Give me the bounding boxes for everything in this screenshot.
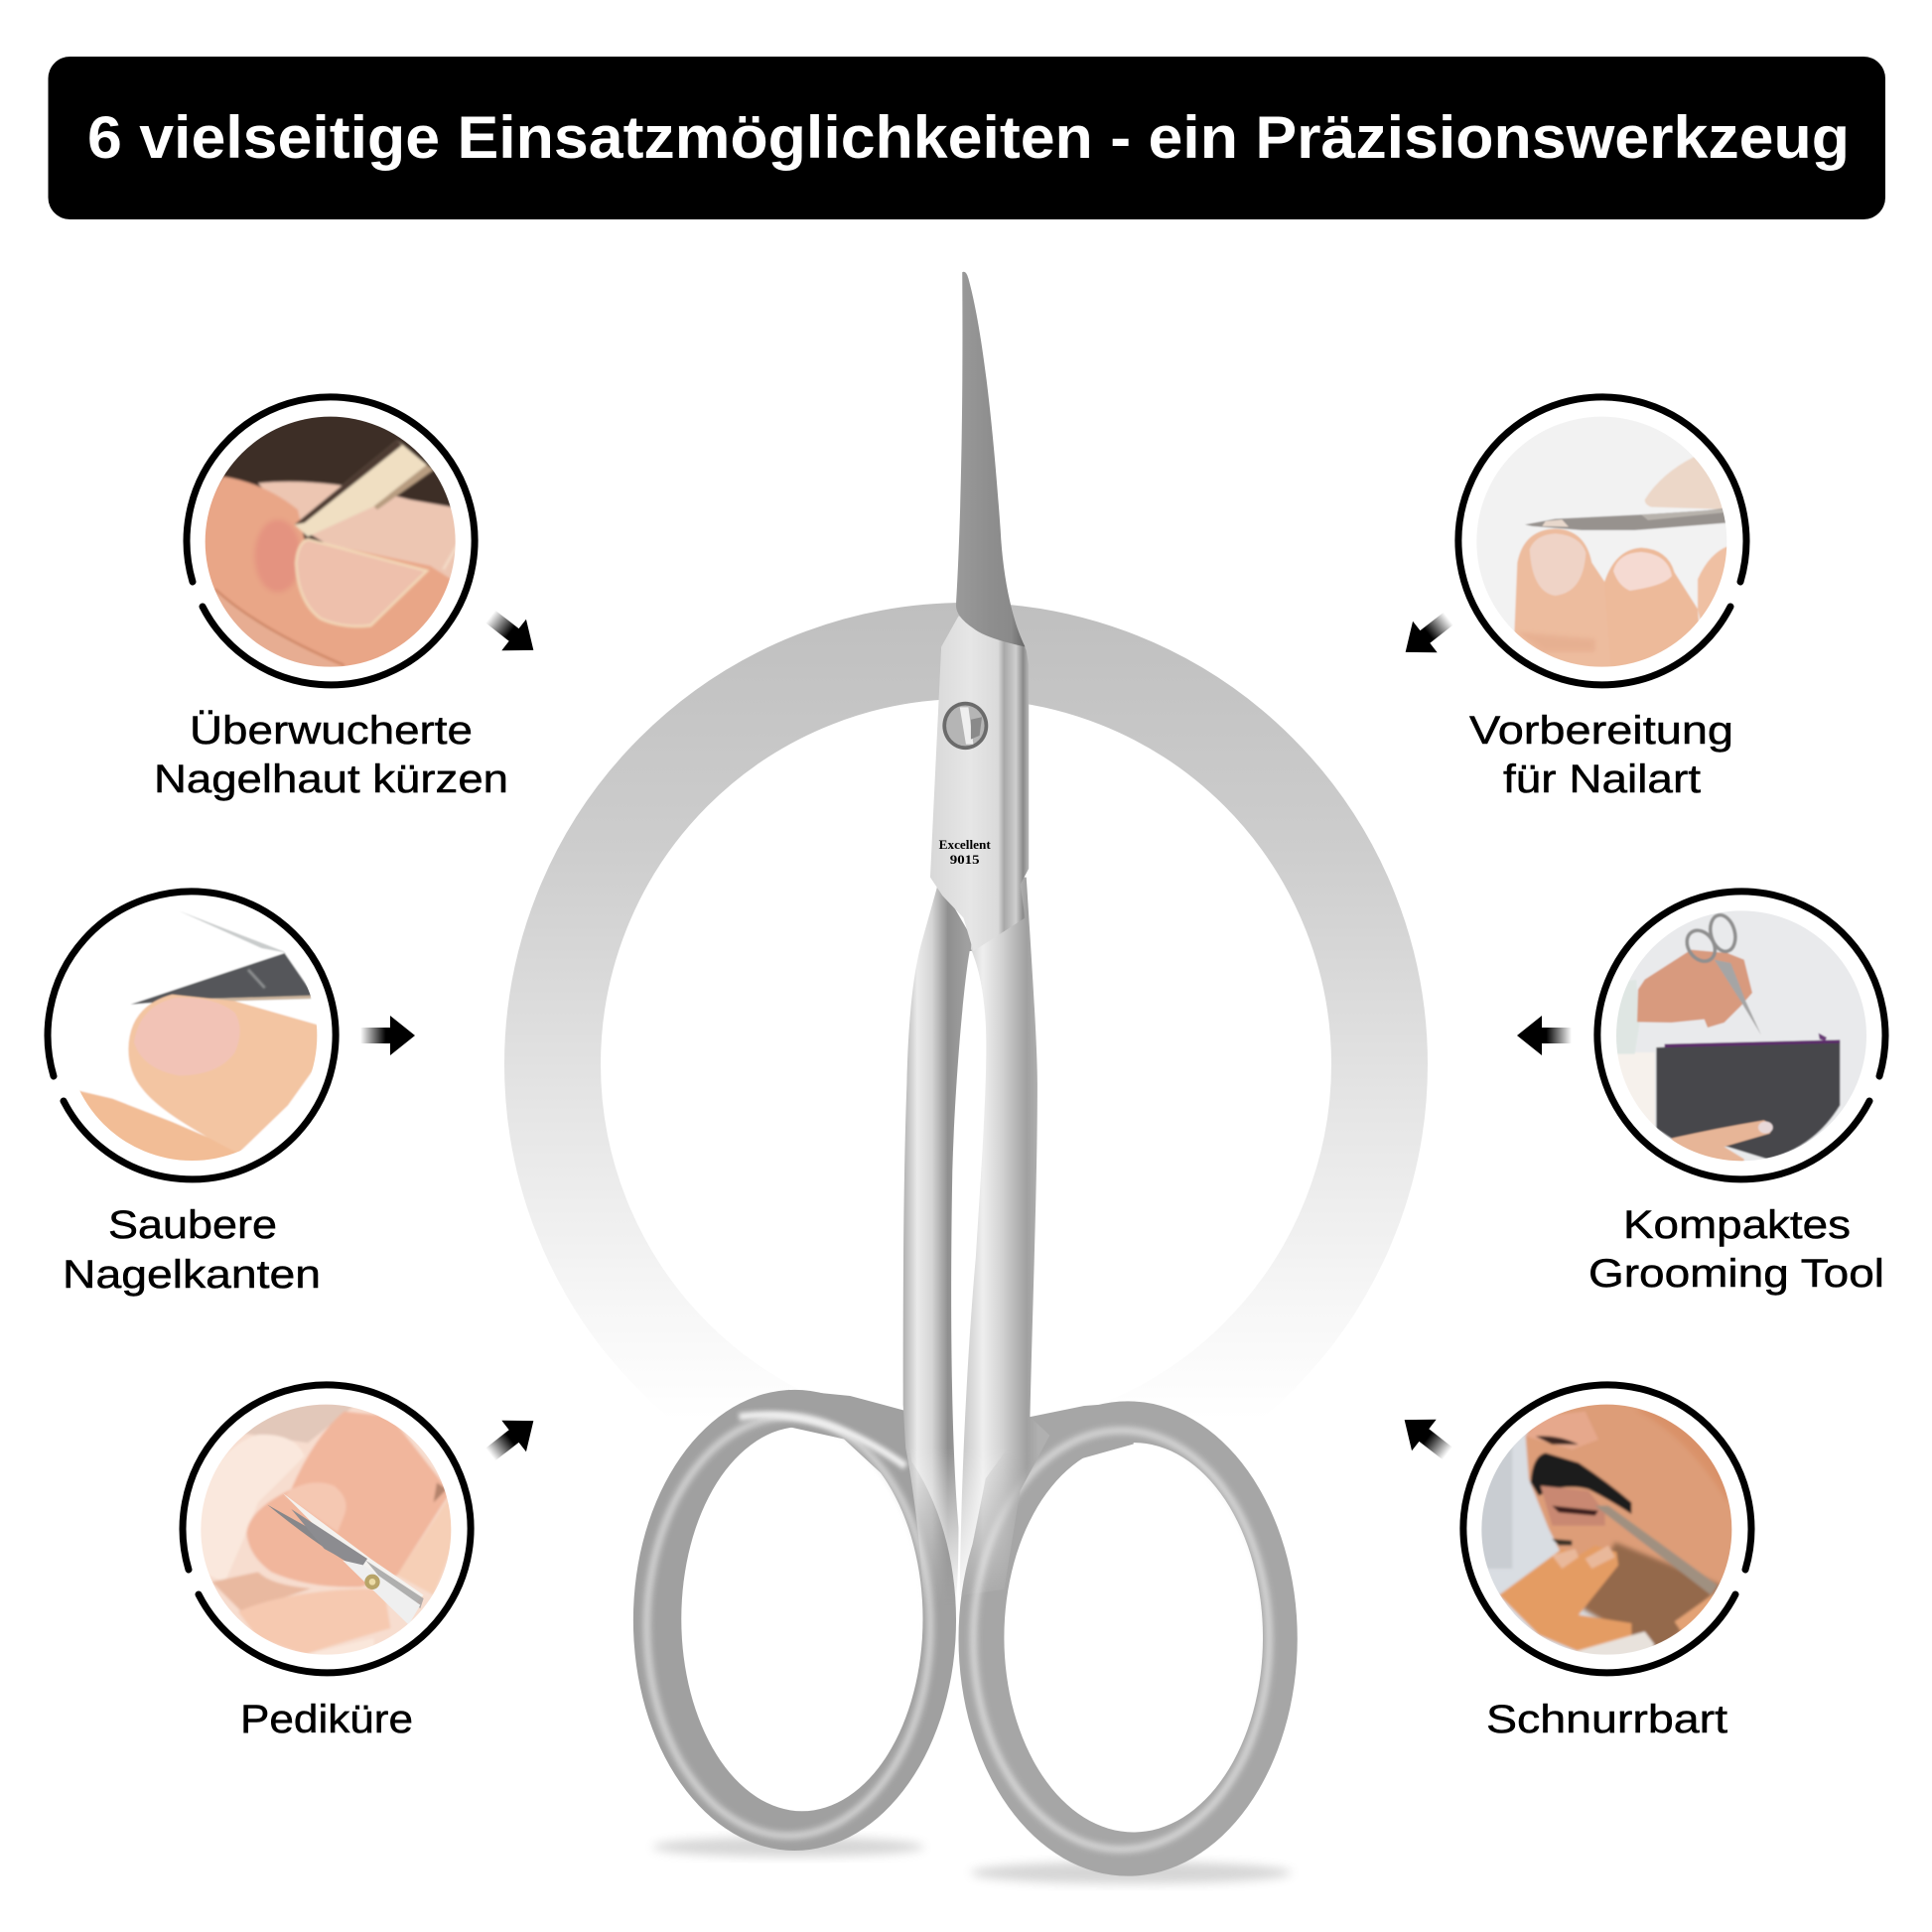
pivot screw [942,702,988,750]
ring [183,1385,471,1673]
panel: Pediküre [183,1385,471,1741]
screw plate [930,616,1029,951]
left shank [903,888,972,1594]
ground shadows [653,1837,1292,1883]
blade [956,272,1026,647]
arrow: bottom-right [1392,1404,1459,1469]
engraving [939,837,991,867]
label: Nagelkanten [63,1253,321,1297]
arrow: top-left [479,601,546,666]
label: für Nailart [1503,758,1701,801]
title banner [48,57,1885,219]
ring [48,892,336,1179]
label: Kompaktes [1623,1203,1851,1247]
label: Vorbereitung [1469,709,1733,753]
right handle ring [958,1401,1298,1876]
label: Grooming Tool [1588,1252,1884,1296]
label: Überwucherte [190,709,473,753]
label: Saubere [108,1203,277,1247]
left handle ring [633,1390,956,1851]
photo: pedicure [201,1404,451,1655]
background gradient ring [552,651,1380,1477]
engraving: Excellent [939,837,991,852]
scissors product [633,272,1298,1883]
engraving: 9015 [950,852,980,867]
arrow: bottom-left [479,1405,546,1470]
ring [1458,397,1746,685]
panel: Saubere Nagelkanten [48,892,336,1297]
label [154,709,508,801]
ring [187,397,475,685]
panel: Kompaktes Grooming Tool [1588,892,1885,1296]
photo: clean nail edge [79,913,318,1161]
label: Schnurrbart [1486,1698,1727,1741]
photo: moustache trim [1481,1404,1731,1655]
photo: cuticle trim [205,417,456,667]
right shank [960,878,1049,1595]
label: Nagelhaut kürzen [154,758,508,801]
panel: Überwucherte Nagelhaut kürzen [154,397,508,801]
arrow: middle-left [360,1016,415,1055]
arrow: top-right [1393,603,1460,668]
label: Pediküre [240,1698,413,1741]
ring [1463,1385,1751,1673]
label [1469,709,1733,801]
panel: Vorbereitung für Nailart [1458,397,1746,801]
title text: 6 vielseitige Einsatzmöglichkeiten - ein Präzisionswerkzeug [87,104,1850,171]
photo: pouch and scissors [1616,911,1866,1162]
label [63,1203,321,1297]
ring [1597,892,1885,1179]
arrow: middle-right [1517,1016,1572,1055]
toe scissors [267,1493,424,1625]
panel: Schnurrbart [1463,1385,1751,1741]
label [1588,1203,1884,1296]
photo: nail art preparation [1477,417,1727,667]
